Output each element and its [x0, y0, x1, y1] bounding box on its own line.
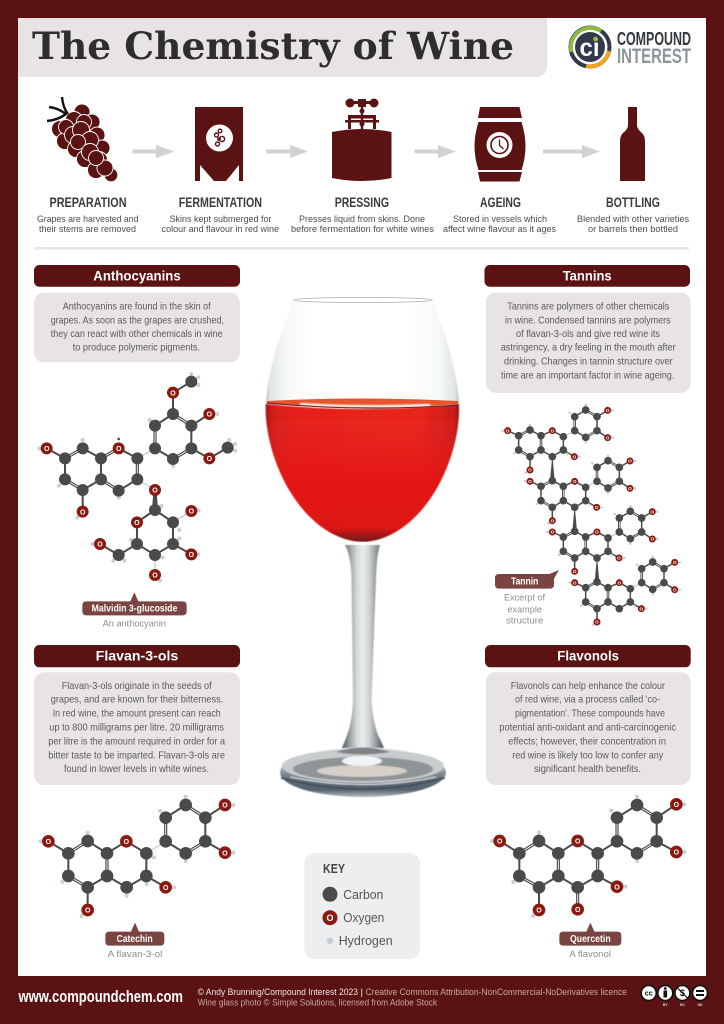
text block: flavonols: Flavonols can help enhance the colour: [511, 681, 666, 692]
text block: tannins: time are an important factor in wine ageing.: [501, 370, 674, 381]
heading: anthocyanins: Anthocyanins: [93, 268, 181, 284]
label: malvidin 3-glucoside: [82, 592, 187, 629]
step: pressing: before fermentation for white wines: [291, 224, 434, 235]
molecule: tannin excerpt: O: [551, 518, 555, 523]
arrow 3: [414, 145, 456, 158]
text block: flavan-3-ols: Flavan-3-ols originate in the seeds of: [62, 681, 212, 692]
text block: tannins: [486, 293, 691, 393]
molecule: catechin: O: [222, 850, 228, 857]
molecule: quercetin: O: [497, 839, 503, 846]
molecule: quercetin: O: [575, 907, 581, 914]
icon: grapes: [52, 104, 118, 182]
text block: flavonols: significant health benefits.: [534, 764, 641, 775]
step: pressing: Presses liquid from skins. Done: [299, 214, 425, 225]
molecule: quercetin: O: [674, 802, 680, 809]
text block: flavonols: effects; however, their concentration in: [508, 736, 666, 747]
key: hydrogen: Hydrogen: [339, 933, 393, 948]
key: oxygen: O: [326, 913, 334, 923]
logo: Compound Interest: COMPOUND: [617, 29, 691, 49]
molecule: catechin: O: [46, 839, 52, 846]
label: tannin: Tannin: [511, 576, 538, 587]
logo: Compound Interest: [570, 28, 691, 68]
label: quercetin: Quercetin: [570, 934, 611, 945]
heading: tannins: [484, 265, 690, 287]
molecule: quercetin: O: [674, 850, 680, 857]
logo: Compound Interest: INTEREST: [617, 45, 691, 68]
text block: tannins: astringency, a dry feeling in the mouth after: [501, 343, 676, 354]
icon: creative commons badges: [641, 986, 708, 1007]
text block: flavonols: pigmentation'. These compounds have: [515, 709, 665, 720]
panel: flavan-3-ols: [34, 645, 240, 959]
step: bottling: [577, 194, 689, 235]
arrow 1: [132, 145, 174, 158]
heading: anthocyanins: [34, 265, 240, 287]
molecule: tannin excerpt: O: [606, 408, 610, 413]
text block: flavan-3-ols: up to 800 milligrams per litre. 20 milligrams: [49, 723, 224, 734]
key: carbon: Carbon: [343, 887, 383, 902]
key: KEY: [323, 861, 345, 876]
step: fermentation: [162, 194, 279, 235]
label: malvidin 3-glucoside: An anthocyanin: [103, 619, 166, 629]
molecule: tannin excerpt: O: [528, 468, 532, 473]
step: bottling: or barrels then bottled: [588, 224, 678, 235]
molecule: tannin excerpt: O: [551, 428, 555, 433]
label: malvidin 3-glucoside: Malvidin 3-glucoside: [92, 604, 178, 615]
panel: anthocyanins: [34, 265, 240, 629]
step: ageing: affect wine flavour as it ages: [443, 224, 556, 235]
logo: Compound Interest: ci: [580, 34, 600, 62]
heading: flavonols: Flavonols: [557, 648, 619, 664]
text block: flavan-3-ols: grapes, and are known for their bitterness.: [51, 695, 223, 706]
molecule: tannin excerpt: O: [528, 479, 532, 484]
step: pressing: [291, 194, 434, 235]
step: fermentation: FERMENTATION: [179, 194, 262, 210]
label: catechin: [105, 923, 164, 959]
key: oxygen: [322, 910, 384, 925]
molecule: tannin excerpt: O: [618, 580, 622, 585]
text block: flavan-3-ols: In red wine, the amount present can reach: [53, 709, 221, 720]
heading: flavonols: [485, 645, 691, 667]
step: ageing: AGEING: [480, 194, 521, 210]
text block: anthocyanins: Anthocyanins are found in the skin of: [63, 301, 211, 312]
text block: flavan-3-ols: [34, 672, 240, 785]
molecule: malvidin 3-glucoside: O: [189, 509, 195, 516]
icon: creative commons badges: BY: [663, 1003, 668, 1007]
molecule: tannin excerpt: O: [651, 537, 655, 542]
label: catechin: A flavan-3-ol: [108, 949, 162, 959]
step: fermentation: colour and flavour in red wine: [162, 224, 279, 235]
molecule: tannin excerpt: O: [551, 530, 555, 535]
molecule: quercetin: O: [536, 908, 542, 915]
wine glass photo: [266, 297, 459, 797]
molecule: tannin excerpt: O: [617, 556, 621, 561]
molecule: malvidin 3-glucoside: [37, 372, 237, 583]
molecule: malvidin 3-glucoside: O: [97, 542, 103, 549]
molecule: malvidin 3-glucoside: O: [134, 520, 140, 527]
molecule: malvidin 3-glucoside: O: [152, 573, 158, 580]
text block: anthocyanins: grapes. As soon as the grapes are crushed,: [51, 315, 224, 326]
icon: barrel: [474, 107, 526, 182]
molecule: malvidin 3-glucoside: O: [152, 488, 158, 495]
panel: tannins: [484, 265, 691, 626]
text block: flavan-3-ols: found in lower levels in white wines.: [64, 764, 209, 775]
molecule: tannin excerpt: O: [595, 530, 599, 535]
panel: flavonols: [485, 645, 691, 959]
molecule: tannin excerpt: O: [651, 509, 655, 514]
molecule: tannin excerpt: O: [573, 580, 577, 585]
molecule: tannin excerpt: O: [573, 454, 577, 459]
footer: |: [360, 987, 363, 998]
text block: anthocyanins: to produce polymeric pigments.: [73, 343, 200, 354]
footer: Creative Commons Attribution-NonCommercial-NoDerivatives licence: [366, 987, 627, 998]
molecule: tannin excerpt: O: [606, 435, 610, 440]
glass foot: [280, 748, 446, 797]
heading: flavan-3-ols: [34, 645, 240, 667]
step: preparation: [37, 194, 138, 235]
molecule: malvidin 3-glucoside: O: [207, 456, 213, 463]
text block: flavonols: potential anti-oxidant and anti-carcinogenic: [499, 723, 676, 734]
molecule: malvidin 3-glucoside: O: [189, 552, 195, 559]
arrow 4: [543, 145, 600, 158]
text block: tannins: drinking. Changes in tannin structure over: [504, 357, 673, 368]
glass bowl upper: [266, 298, 459, 404]
molecule: tannin excerpt: O: [506, 428, 510, 433]
label: quercetin: A flavonol: [569, 949, 611, 959]
step: bottling: Blended with other varieties: [577, 214, 689, 225]
molecule: malvidin 3-glucoside: O: [170, 390, 176, 397]
molecule: tannin excerpt: O: [573, 569, 577, 574]
text block: anthocyanins: they can react with other chemicals in wine: [51, 329, 223, 340]
molecule: tannin excerpt: O: [628, 459, 632, 464]
text block: tannins: Tannins are polymers of other chemicals: [507, 301, 669, 312]
molecule: catechin: O: [124, 839, 130, 846]
label: quercetin: [559, 923, 621, 959]
molecule: malvidin 3-glucoside: O: [80, 509, 86, 516]
label: tannin: [495, 570, 559, 625]
molecule: malvidin 3-glucoside: O: [116, 446, 122, 453]
text block: flavonols: of red wine, via a process called 'co-: [515, 695, 660, 706]
icon: grape stem: [47, 97, 68, 121]
molecule: tannin excerpt: O: [640, 606, 644, 611]
icon: wine press: [332, 98, 392, 181]
step: ageing: [443, 194, 556, 235]
wine: [266, 398, 459, 542]
icon: bottle: [620, 107, 645, 181]
title banner: [18, 18, 547, 77]
key: [304, 853, 420, 959]
text block: flavonols: [486, 672, 691, 785]
molecule: tannin excerpt: O: [595, 505, 599, 510]
step: preparation: their stems are removed: [39, 224, 136, 235]
label: tannin: structure: [506, 615, 543, 625]
molecule: malvidin 3-glucoside: O: [44, 446, 50, 453]
heading: flavan-3-ols: Flavan-3-ols: [96, 648, 179, 664]
text block: anthocyanins: [34, 293, 240, 362]
title banner: The Chemistry of Wine: [32, 24, 514, 68]
molecule: tannin excerpt: O: [673, 560, 677, 565]
heading: tannins: Tannins: [563, 268, 612, 284]
molecule: catechin: O: [222, 803, 228, 810]
molecule: tannin excerpt: O: [628, 486, 632, 491]
text block: tannins: of flavan-3-ols and give red wine its: [516, 329, 660, 340]
icon: creative commons badges: $: [680, 988, 685, 998]
icon: fermentation tank: [195, 107, 243, 181]
molecule: malvidin 3-glucoside: O: [207, 412, 213, 419]
step: preparation: PREPARATION: [50, 194, 126, 210]
glass stem: [342, 545, 384, 748]
footer: www.compoundchem.com: [18, 987, 183, 1006]
molecule: tannin excerpt: [501, 404, 681, 626]
process row: [37, 97, 689, 235]
step: bottling: BOTTLING: [606, 194, 660, 210]
molecule: tannin excerpt: O: [595, 620, 599, 625]
icon: creative commons badges: cc: [645, 990, 653, 998]
molecule: catechin: O: [163, 885, 169, 892]
text block: flavan-3-ols: bitter taste to be imparted. Flavan-3-ols are: [48, 750, 225, 761]
text block: tannins: in wine. Condensed tannins are polymers: [505, 315, 671, 326]
step: preparation: Grapes are harvested and: [37, 214, 138, 225]
text block: flavonols: red wine is likely too low to confer any: [512, 750, 664, 761]
label: tannin: Excerpt of: [504, 593, 545, 603]
molecule: quercetin: O: [575, 839, 581, 846]
step: pressing: PRESSING: [335, 194, 389, 210]
icon: creative commons badges: NC: [680, 1003, 685, 1007]
label: catechin: Catechin: [117, 934, 153, 945]
step: fermentation: Skins kept submerged for: [170, 214, 272, 225]
key: oxygen: Oxygen: [343, 910, 384, 925]
footer: © Andy Brunning/Compound Interest 2023: [198, 987, 358, 998]
glass rim: [294, 297, 432, 303]
footer: Wine glass photo © Simple Solutions, licensed from Adobe Stock: [198, 998, 437, 1008]
label: tannin: example: [507, 605, 542, 615]
icon: creative commons badges: ND: [697, 1003, 703, 1007]
molecule: catechin: [39, 795, 235, 918]
text block: flavan-3-ols: per litre is the amount required in order for a: [48, 736, 225, 747]
step: ageing: Stored in vessels which: [453, 214, 547, 225]
molecule: tannin excerpt: O: [673, 587, 677, 592]
molecule: quercetin: [490, 795, 686, 918]
molecule: quercetin: O: [614, 884, 620, 891]
arrow 2: [266, 145, 308, 158]
molecule: catechin: O: [85, 908, 91, 915]
footer: [18, 986, 707, 1008]
molecule: tannin excerpt: O: [573, 479, 577, 484]
